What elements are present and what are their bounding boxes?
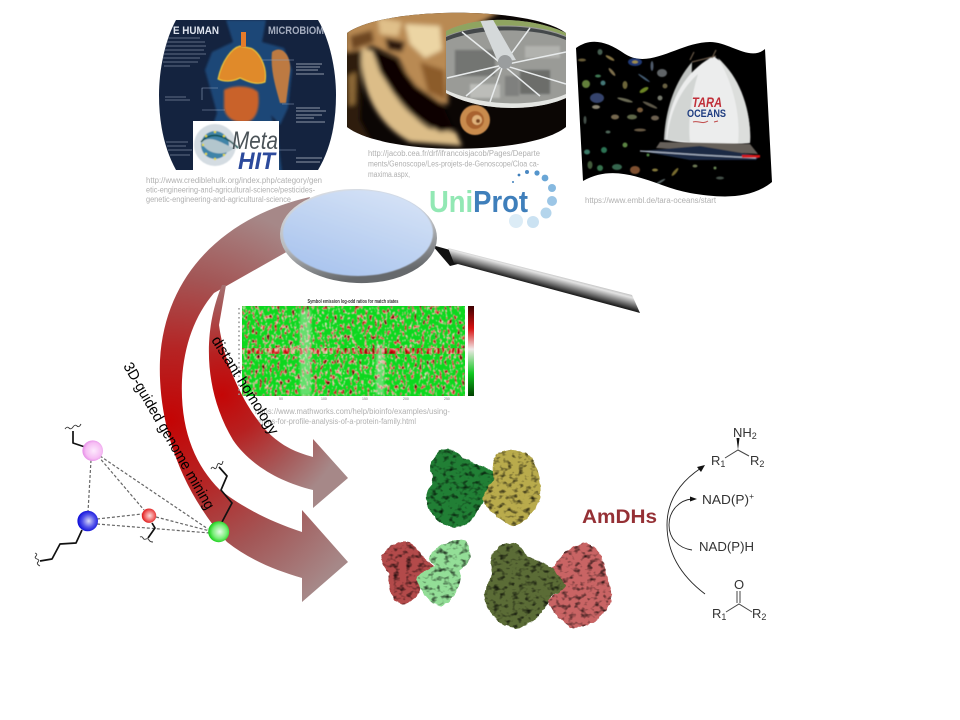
caption: genoscope url <box>368 149 541 179</box>
caption: crediblehulk url <box>146 176 322 204</box>
ketone substrate: R <box>752 606 761 621</box>
protein: red and light green dimer <box>381 540 470 606</box>
caption: mathworks url: https://www.mathworks.com/help/bioinfo/examples/using- <box>255 407 450 416</box>
caption: crediblehulk url: http://www.crediblehulk.org/index.php/category/gen <box>146 176 322 185</box>
wavy chain ends <box>35 424 223 566</box>
leader lines <box>202 60 296 150</box>
diagram: active-site residue geometry <box>35 424 232 566</box>
text lines left <box>162 38 206 155</box>
sphere: pink residue <box>82 440 103 461</box>
arrow: distant homology <box>209 285 348 508</box>
ketone substrate <box>712 577 766 622</box>
handle neck <box>432 245 458 266</box>
axis tick labels: 150 <box>362 397 368 401</box>
dark cavity <box>373 52 454 132</box>
sphere: blue residue <box>77 511 98 531</box>
heading: AmDHs: AmDHs <box>582 507 657 528</box>
panel: cloaca maxima image <box>347 12 566 149</box>
sail text: TARA: TARA <box>692 94 722 110</box>
dashed distances <box>88 456 210 533</box>
heat map: symbol emission log-odd ratios <box>239 299 474 401</box>
icon: globe <box>194 124 238 166</box>
amine product: 2 <box>759 459 764 469</box>
protein: green and olive dimer <box>426 449 541 527</box>
figure: intestines <box>224 86 259 122</box>
bright crescent <box>361 48 462 146</box>
text lines right <box>296 64 326 162</box>
caption: genoscope url: ments/Genoscope/Les-projets-de-Genoscope/Cloa ca- <box>368 160 539 168</box>
color bar <box>468 306 474 396</box>
ketone substrate: R <box>712 606 721 621</box>
panel: human microbiome image <box>155 18 340 173</box>
label: 3D-guided genome mining: 3D-guided genome mining <box>120 360 218 513</box>
logo word: HIT: HIT <box>238 148 277 175</box>
caption: embl url: https://www.embl.de/tara-oceans/start <box>585 196 717 205</box>
sphere: green residue <box>208 521 229 542</box>
ketone substrate: 1 <box>721 612 726 622</box>
axis tick labels: 250 <box>444 397 450 401</box>
caption: mathworks url <box>255 407 450 426</box>
magnifying glass <box>278 186 640 313</box>
sphere: red residue <box>142 508 156 523</box>
caption: genoscope url: maxima.aspx, <box>368 170 410 179</box>
panel inset: settling tank wheel <box>446 20 566 108</box>
amine product: 2 <box>752 431 757 441</box>
top tan tissue <box>345 8 500 105</box>
amine product: 1 <box>720 459 725 469</box>
axis tick labels: 100 <box>321 397 327 401</box>
amine product <box>711 425 764 469</box>
figure: trachea <box>241 32 246 47</box>
sails <box>664 50 750 145</box>
reaction scheme <box>667 425 766 622</box>
amine product: R <box>711 453 720 468</box>
handle <box>448 248 640 313</box>
axis tick labels <box>279 397 450 401</box>
arrow: NAD(P)H to NAD(P)+ <box>669 496 697 550</box>
icon: ring of dots <box>509 170 557 228</box>
caption: mathworks url: hmms-for-profile-analysis-of-a-protein-family.html <box>255 417 416 426</box>
image heading: microbiome: MICROBIOM <box>268 25 324 37</box>
image heading: the human: E HUMAN <box>173 25 219 37</box>
cofactor: NAD(P)+: + <box>749 492 754 501</box>
logo: MetaHIT <box>193 121 279 175</box>
label: distant homology: distant homology <box>208 333 282 438</box>
arrow: ketone to amine <box>667 465 705 594</box>
sail text: OCEANS: OCEANS <box>687 108 726 120</box>
logo word: UniProt: UniProt <box>429 184 528 219</box>
logo: UniProt <box>429 170 557 228</box>
arrow: 3D-guided genome mining <box>160 197 348 602</box>
left dark brown margin <box>347 48 373 139</box>
axis tick labels: 50 <box>279 397 283 401</box>
figure: body silhouette <box>205 20 292 172</box>
figure: lungs <box>218 46 266 83</box>
boat hull <box>640 142 760 160</box>
ketone substrate: 2 <box>761 612 766 622</box>
pale columns <box>300 310 384 395</box>
cofactor: NAD(P)+: NAD(P) <box>702 492 747 507</box>
axis tick labels: 200 <box>403 397 409 401</box>
ketone substrate: O <box>734 577 744 592</box>
lens rim <box>278 186 439 286</box>
plankton specimens <box>578 49 724 186</box>
cofactor: NAD(P)H: NAD(P)H <box>699 539 754 554</box>
protein: dark olive and pink dimer <box>484 543 612 628</box>
side chains <box>40 431 232 561</box>
lens glass <box>283 190 433 276</box>
sail text: signature <box>693 121 718 123</box>
logo word: Meta: Meta <box>232 127 278 155</box>
panel: Tara Oceans image <box>576 42 772 196</box>
caption: crediblehulk url: etic-engineering-and-agricultural-science/pesticides- <box>146 186 315 194</box>
caption: crediblehulk url: genetic-engineering-and-agricultural-science <box>146 195 291 204</box>
amine product: NH <box>733 425 752 440</box>
heat map title: Symbol emission log-odd ratios for match states <box>308 299 399 305</box>
figure: arm muscle <box>272 49 290 103</box>
shell <box>460 105 490 135</box>
row labels <box>238 308 240 395</box>
caption: genoscope url: http://jacob.cea.fr/drf/ifrancoisjacob/Pages/Departe <box>368 149 541 158</box>
amine product: R <box>750 453 759 468</box>
